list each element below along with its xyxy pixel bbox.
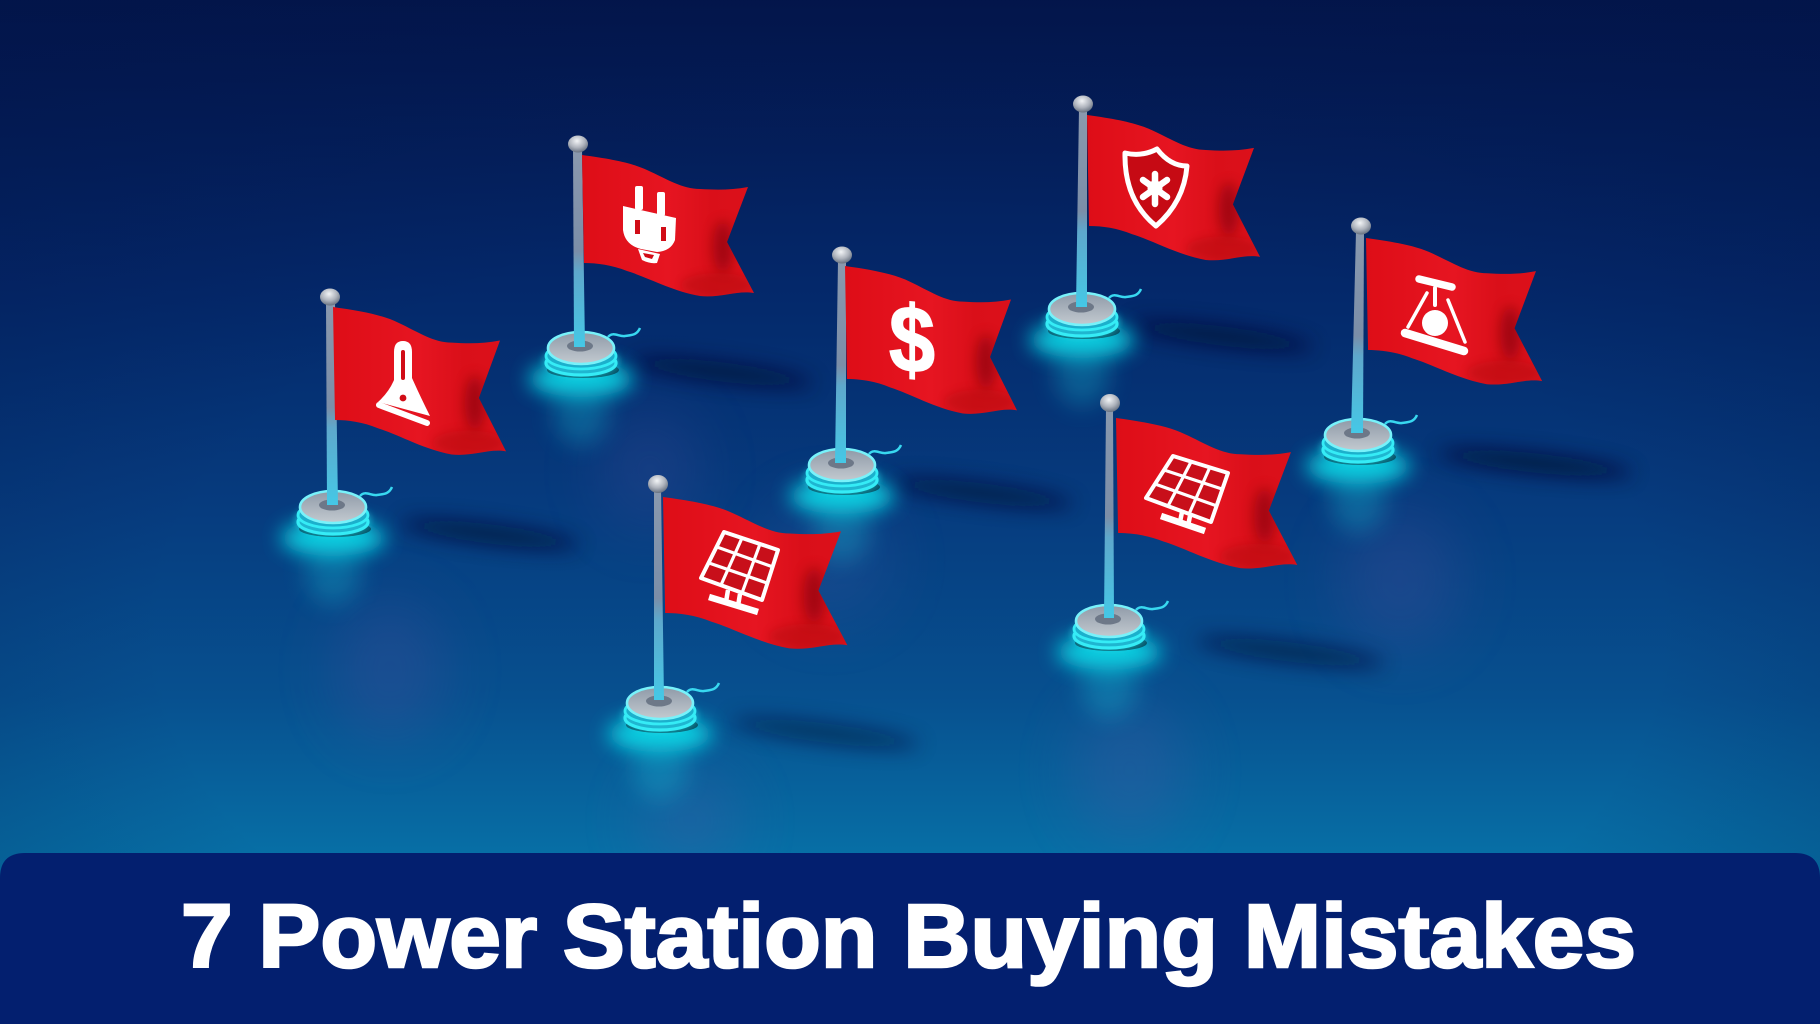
- pole: [1351, 231, 1364, 433]
- cloth: [333, 307, 506, 456]
- icon: dollar sign: $: [889, 285, 935, 394]
- ball: [1351, 218, 1371, 234]
- flag: shield: [1030, 96, 1260, 406]
- title: 7 Power Station Buying Mistakes: [181, 887, 1636, 987]
- pole: [573, 148, 585, 347]
- icon: solar panel: [701, 532, 778, 612]
- title banner: [0, 853, 1820, 1024]
- ball: [320, 288, 340, 306]
- pole: [1076, 108, 1087, 307]
- base: [790, 445, 901, 562]
- pole: [654, 488, 664, 700]
- flag: solar panel left: [608, 475, 847, 800]
- base: [608, 683, 719, 800]
- cloth: [1366, 238, 1542, 385]
- ball: [832, 246, 852, 264]
- cloth: [1087, 115, 1260, 261]
- cast shadows: [399, 315, 1634, 755]
- base: [529, 328, 640, 445]
- ball: [1100, 394, 1120, 412]
- base: [1030, 289, 1141, 406]
- flag: plug: [529, 136, 754, 445]
- ball: [648, 475, 668, 493]
- ball: [1073, 96, 1093, 112]
- icon: flask: [1405, 279, 1465, 351]
- cloth: [663, 497, 847, 650]
- icon: plug: [623, 186, 676, 263]
- flag: flask: [1306, 218, 1542, 532]
- flag: solar panel right: [1057, 394, 1297, 718]
- cloth: [845, 266, 1017, 415]
- cloth: [582, 155, 754, 297]
- icon: thermometer bell: [378, 341, 430, 423]
- base: [1306, 415, 1417, 532]
- ball: [568, 136, 588, 152]
- base: [1057, 601, 1168, 718]
- base: [281, 487, 392, 604]
- cloth: [1116, 418, 1297, 569]
- flag: thermometer bell: [281, 288, 506, 604]
- flag: dollar: [790, 246, 1017, 562]
- pole: [835, 260, 846, 463]
- pole: [326, 302, 338, 505]
- pole: [1104, 407, 1114, 618]
- icon: solar panel: [1146, 456, 1228, 531]
- icon: shield: [1125, 149, 1187, 226]
